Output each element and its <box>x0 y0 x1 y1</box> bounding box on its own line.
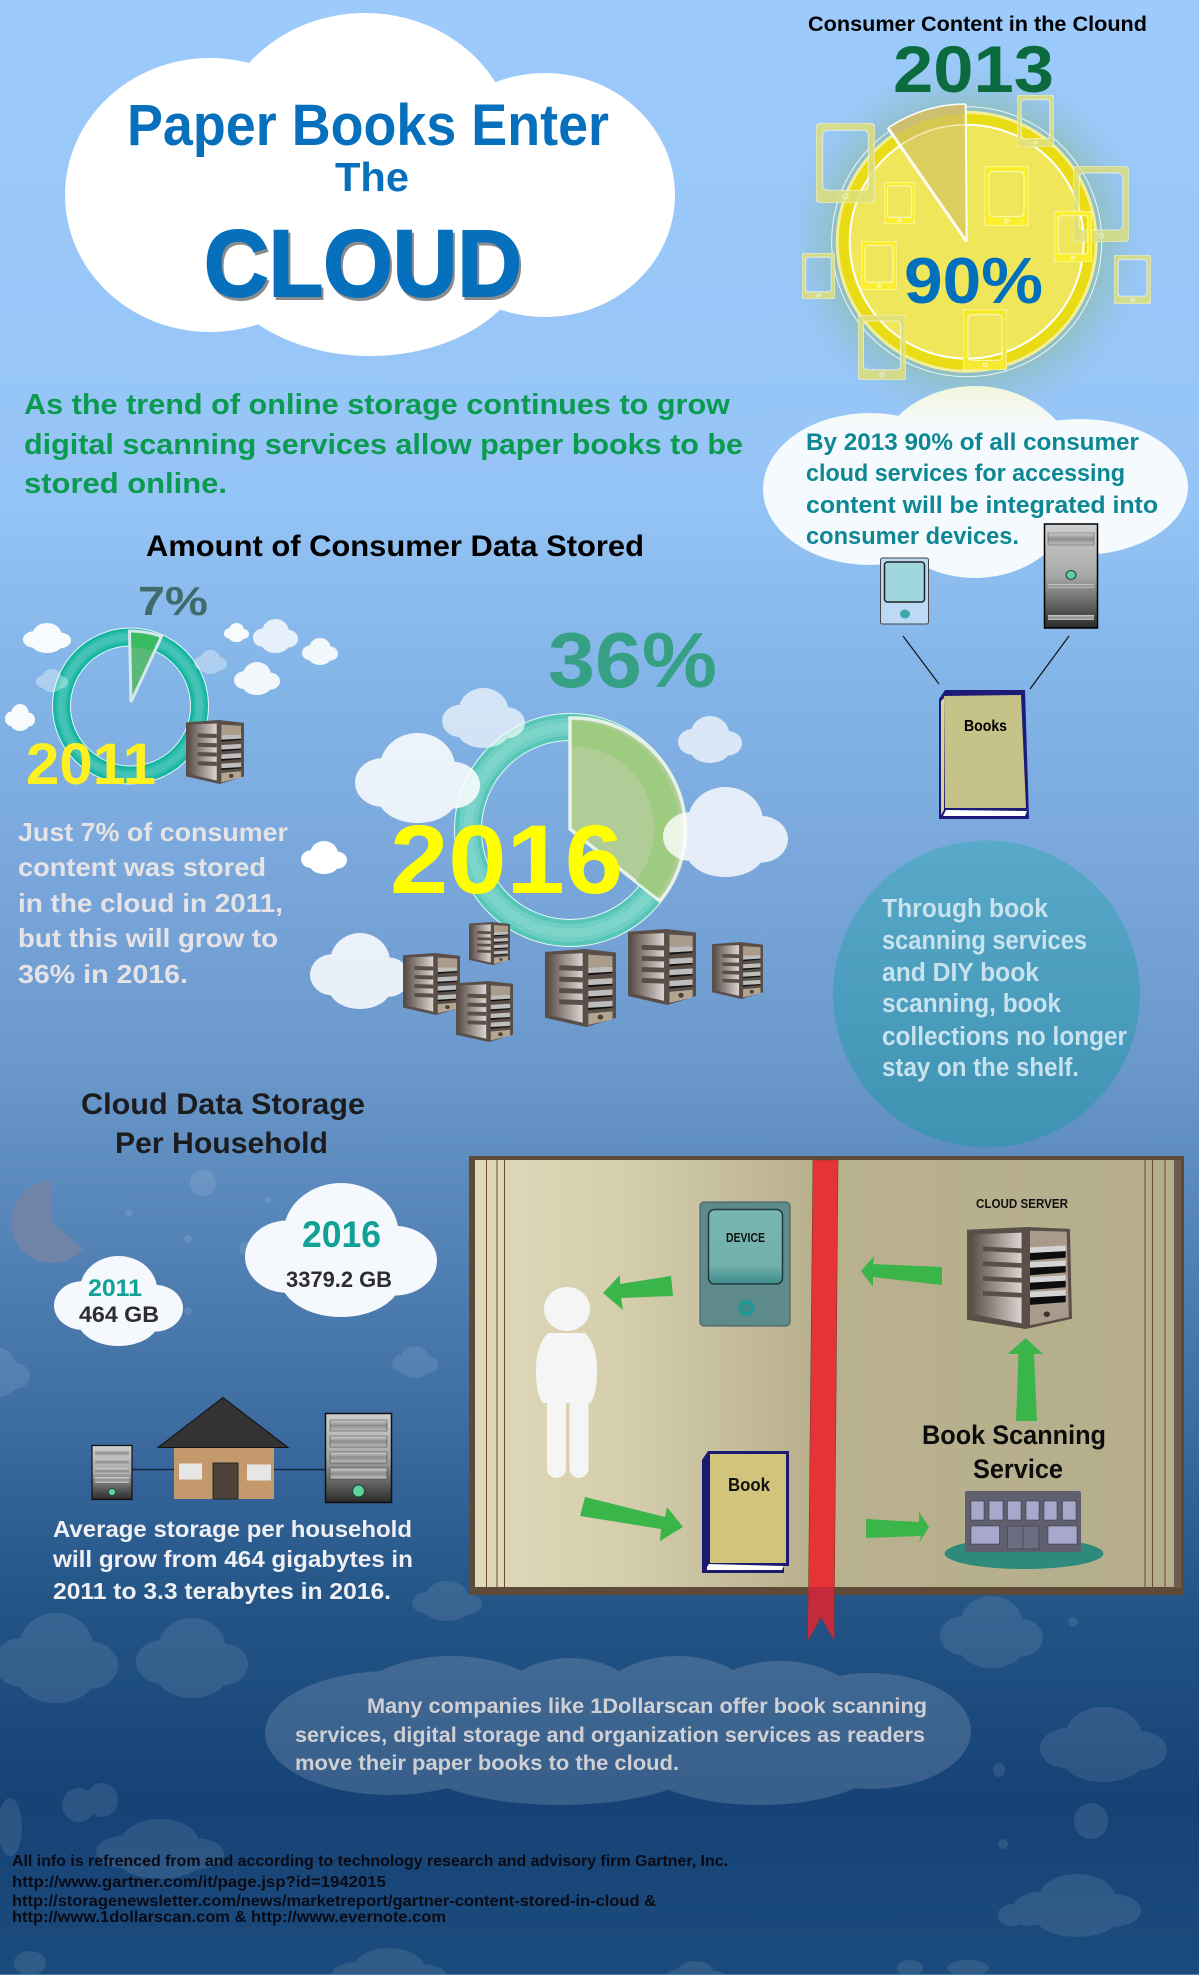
arrow: server to device <box>861 1256 942 1287</box>
arrow: device to person <box>603 1275 673 1310</box>
icon: device tablet: DEVICE <box>726 1230 765 1245</box>
icon: person <box>536 1287 597 1478</box>
icon: scanning building <box>944 1491 1104 1569</box>
callout circle: book scanning: Through book <box>882 895 1049 923</box>
text: household statement: 2011 to 3.3 terabytes in 2016. <box>53 1578 391 1604</box>
title cloud <box>65 13 675 356</box>
arrow: person to book <box>580 1497 683 1541</box>
heading: book scanning service: Service <box>973 1454 1063 1484</box>
title: CLOUD <box>204 211 522 317</box>
icon: server 2011 <box>186 720 244 784</box>
connector lines to book <box>903 636 1069 689</box>
title: The <box>335 154 409 200</box>
arrow: scanning service to server <box>1008 1338 1043 1421</box>
intro text: stored online. <box>24 468 227 500</box>
source footnotes: http://storagenewsletter.com/news/marketreport/gartner-content-stored-in-cloud & <box>12 1893 656 1910</box>
icon: cloud server <box>967 1227 1072 1329</box>
icon: paper book: Book <box>728 1475 771 1495</box>
background faint clouds <box>0 1170 1167 1975</box>
label: cloud server: CLOUD SERVER <box>976 1196 1069 1211</box>
title: Paper Books Enter <box>127 93 609 158</box>
cloud: 2011 storage <box>54 1256 183 1346</box>
arrow: book to scanning service <box>866 1512 929 1543</box>
heading: book scanning service: Book Scanning <box>922 1420 1106 1450</box>
intro text: As the trend of online storage continues to grow <box>24 389 730 421</box>
icons: server cluster 2016 <box>403 922 763 1042</box>
cloud: 2016 storage: 3379.2 GB <box>286 1267 392 1292</box>
callout cloud: companies: Many companies like 1Dollarscan offer book scanning <box>367 1694 927 1718</box>
cloud: 2011 storage: 2011 <box>88 1275 142 1302</box>
source footnotes: http://www.gartner.com/it/page.jsp?id=1942015 <box>12 1874 386 1891</box>
source footnotes: http://www.1dollarscan.com & http://www.evernote.com <box>12 1909 446 1926</box>
intro text <box>24 389 743 500</box>
icon: book with label: Books <box>964 718 1007 735</box>
value 90 percent: 90% <box>904 244 1043 317</box>
callout cloud: companies: services, digital storage and organization services as readers <box>295 1723 925 1747</box>
text: 2013 statement: content will be integrated into <box>806 492 1158 519</box>
panel: open book diagram <box>469 1156 1184 1640</box>
year 2013: 2013 <box>893 32 1054 106</box>
icon: large home server <box>326 1414 392 1502</box>
moon shape <box>11 1181 83 1263</box>
icons: floating tablets <box>802 95 1151 380</box>
donut chart: 2016 <box>454 714 686 946</box>
heading: amount of consumer data: Amount of Consumer Data Stored <box>146 530 644 563</box>
icon: tablet device <box>880 558 928 624</box>
connector lines to house <box>132 1468 326 1470</box>
text: household statement: Average storage per household <box>53 1516 412 1542</box>
callout circle: book scanning: collections no longer <box>882 1023 1127 1051</box>
text: 2011 statement: in the cloud in 2011, <box>18 888 283 918</box>
translucent clouds over 2011 chart <box>36 650 227 692</box>
source footnotes: All info is refrenced from and according to technology research and advisory firm Gartner, Inc. <box>12 1853 728 1870</box>
text: 2011 statement: content was stored <box>18 852 266 882</box>
callout circle: book scanning: scanning, book <box>882 990 1062 1018</box>
callout circle: book scanning <box>833 840 1140 1148</box>
icon: tower server <box>1044 524 1098 628</box>
small clouds behind 2011 chart <box>5 619 347 874</box>
icon: small home server <box>92 1446 132 1500</box>
text: household statement: will grow from 464 gigabytes in <box>52 1546 413 1572</box>
clouds around 2016 chart <box>310 716 742 1009</box>
source footnotes <box>12 1853 728 1926</box>
callout circle: book scanning: scanning services <box>882 927 1087 955</box>
text: household statement <box>52 1516 413 1604</box>
text: 2011 statement: but this will grow to <box>18 923 278 953</box>
icon: house <box>158 1398 288 1499</box>
cloud: 2016 storage <box>245 1183 437 1317</box>
cloud: 2011 storage: 464 GB <box>79 1302 159 1327</box>
heading: cloud data storage: Per Household <box>115 1127 328 1160</box>
pie chart: 90 percent <box>832 104 1102 377</box>
text: 2013 statement: consumer devices. <box>806 523 1019 550</box>
intro text: digital scanning services allow paper books to be <box>24 429 743 461</box>
callout circle: book scanning: stay on the shelf. <box>882 1054 1079 1082</box>
callout circle: book scanning: and DIY book <box>882 959 1040 987</box>
heading: consumer content: Consumer Content in the Clound <box>808 12 1147 36</box>
icon: device tablet <box>700 1202 790 1326</box>
text: 2011 statement: 36% in 2016. <box>18 959 188 989</box>
text: 2013 statement <box>806 429 1158 550</box>
heading: cloud data storage: Cloud Data Storage <box>81 1088 365 1121</box>
title <box>127 93 609 317</box>
callout cloud: companies <box>265 1656 971 1805</box>
bookmark ribbon <box>808 1160 838 1640</box>
text: 2011 statement: Just 7% of consumer <box>18 817 288 847</box>
cloud: 2016 storage: 2016 <box>302 1214 381 1255</box>
icon: book with label <box>939 690 1029 819</box>
year 2011: 2011 <box>26 732 156 797</box>
donut chart: 2011 <box>52 628 208 784</box>
pie glow <box>789 64 1145 420</box>
heading: cloud data storage <box>81 1088 365 1160</box>
clouds overlapping 2016 chart <box>355 688 788 877</box>
value 7 percent: 7% <box>138 578 208 624</box>
heading: book scanning service <box>922 1420 1106 1484</box>
text: 2013 statement: By 2013 90% of all consumer <box>806 429 1139 456</box>
text: 2013 statement: cloud services for accessing <box>806 460 1125 487</box>
callout cloud: companies: move their paper books to the cloud. <box>295 1751 679 1775</box>
text: 2011 statement <box>18 817 288 989</box>
icon: paper book <box>702 1451 789 1573</box>
value 36 percent: 36% <box>548 616 717 704</box>
callout cloud: 2013 statement <box>763 386 1188 578</box>
year 2016: 2016 <box>390 805 623 914</box>
